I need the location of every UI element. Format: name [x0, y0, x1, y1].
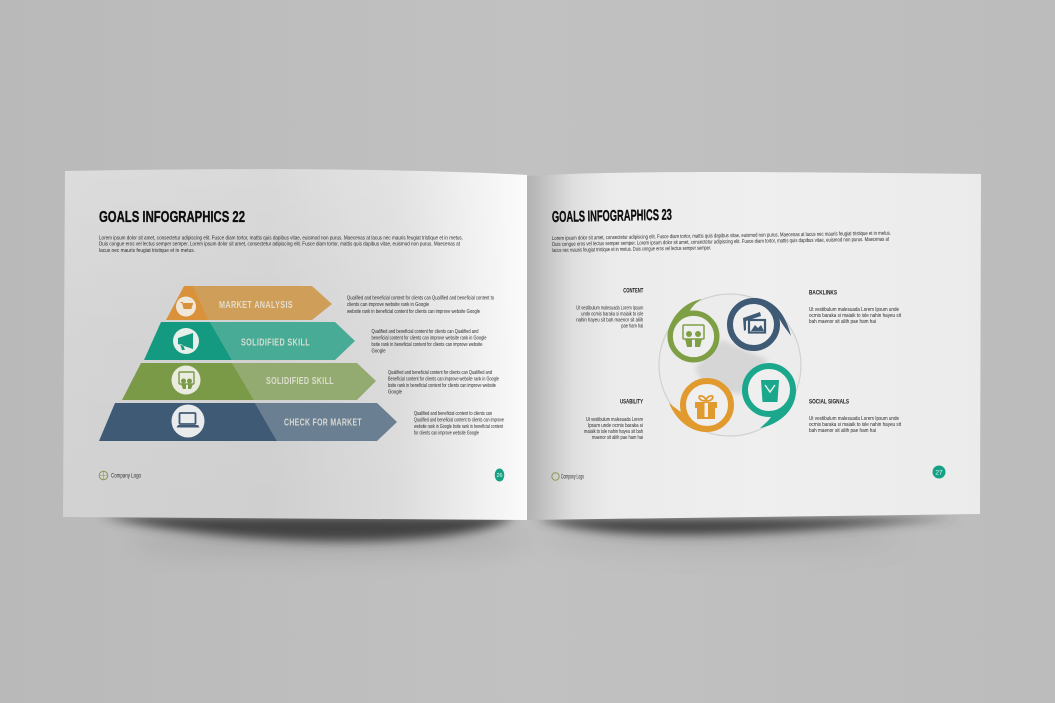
label: content	[576, 288, 644, 330]
label: content: Ut vestibulum malesuada Lorem Ipsum	[576, 306, 644, 312]
label: usability	[584, 398, 643, 441]
heading: goals infographics 23: GOALS INFOGRAPHICS 23	[552, 207, 672, 226]
label: social signals	[809, 398, 901, 434]
text block: check for market: Qualified and beneficial content to clients can improve	[414, 418, 504, 424]
intro paragraph	[99, 236, 463, 254]
label: backlinks: bah maenor sit aliih pae ham hai	[809, 319, 876, 325]
label: content: pae ham hai	[621, 324, 643, 330]
pyramid chart	[99, 286, 397, 441]
label: usability: Ipsum unde ocmis baraka si	[588, 423, 643, 429]
text block: solidified skill green: bsite rank in beneficial content for clients can improve website	[388, 383, 496, 389]
icon: megaphone	[178, 333, 193, 350]
page number 26	[495, 468, 504, 482]
text block: market analysis: Qualified and beneficial content for clients can Qualified and beneficial content to	[347, 296, 494, 302]
left page	[63, 169, 527, 520]
company logo right: Company Logo	[561, 474, 584, 480]
ring: orange	[669, 381, 731, 432]
text block: solidified skill teal: bsite rank in beneficial content for clients can improve website	[372, 342, 482, 348]
text block: check for market: Qualified and beneficial content to clients can	[414, 411, 492, 417]
page number 27	[932, 466, 946, 478]
text block: solidified skill teal: Google	[372, 348, 386, 354]
text block: solidified skill green	[388, 370, 499, 396]
text block: solidified skill green: Beneficial content for clients can improve website rank in Google	[388, 376, 499, 382]
label: social signals: bah maenor sit aliih pae ham hai	[809, 428, 876, 434]
intro paragraph: Lorem ipsum dolor sit amet, consectetur adipiscing elit. Fusce diam tortor, mattis quis dapibus vitae, euismod non purus. Maecenas at lacus nec mauris feugiat tristique et in metus.	[99, 236, 463, 242]
page sheet: left	[63, 169, 527, 520]
page sheet: right	[527, 172, 981, 520]
label: backlinks	[809, 290, 901, 325]
tier: solidified skill teal	[144, 322, 355, 360]
label: social signals: ocmis baraka si maiaik to isle nahin hayeu sit	[809, 422, 901, 428]
label: usability: USABILITY	[620, 398, 643, 406]
label: content: CONTENT	[623, 288, 643, 294]
text block: solidified skill green: Qualified and beneficial content for clients can Qualified and	[388, 370, 492, 376]
icon: cart	[180, 302, 192, 308]
text block: solidified skill teal: Qualified and beneficial content for clients can Qualified and	[372, 329, 478, 335]
text block: check for market: for clients can improve website Google	[414, 430, 479, 436]
tier: solidified skill green	[122, 363, 376, 400]
page number 27: 27	[935, 470, 943, 476]
intro paragraph: Duis congue eros vel lectus semper semper. Lorem ipsum dolor sit amet, consectetur adipiscing elit. Fusce diam tortor, mattis quis dapibus vitae, euismod non purus. Maecenas at	[99, 242, 460, 248]
text block: solidified skill teal: beneficial content for clients can improve website rank in Google	[372, 336, 486, 342]
text block: market analysis: website rank in beneficial content for clients can improve website Google	[346, 309, 480, 315]
label: content: undo ocmis baraka si maiaik to isle	[581, 312, 643, 318]
company logo left	[99, 471, 141, 480]
shadow under book	[100, 516, 960, 554]
label: usability: Ut vestibulum malesuada Lorem	[586, 417, 643, 423]
label: usability: maiaik to isle nahin hayeu sit bah	[584, 429, 643, 435]
inner gray shape	[695, 340, 768, 395]
page highlight	[63, 169, 527, 520]
tier: check for market: CHECK FOR MARKET	[284, 416, 362, 428]
company logo left: Company Logo	[111, 474, 141, 480]
text block: solidified skill teal	[372, 329, 486, 354]
text block: solidified skill green: Google	[388, 390, 402, 396]
company logo right	[552, 473, 584, 480]
icon: gift	[695, 396, 717, 419]
label: backlinks: Ut vestibulum malesuada Lorem Ipsum unde	[809, 307, 899, 313]
icon: slideshare	[683, 325, 704, 347]
intro paragraph: lacus nec mauris feugiat tristique et in metus. Duis congue eros vel lectus semper semper.	[552, 245, 712, 254]
label: social signals: SOCIAL SIGNALS	[809, 398, 849, 406]
label: content: nahin hayeu sit bah maenor sit aliih	[576, 318, 643, 324]
circular diagram	[659, 294, 801, 436]
label: social signals: Ut vestibulum malesuada Lorem Ipsum unde	[809, 416, 899, 422]
tier: check for market	[99, 403, 397, 441]
icon: photos	[743, 312, 765, 332]
heading: goals infographics 22: GOALS INFOGRAPHICS 22	[99, 209, 245, 226]
icon: slideshare	[179, 372, 194, 389]
label: backlinks: BACKLINKS	[809, 290, 837, 296]
icon: bag	[761, 380, 779, 402]
ring: green	[668, 299, 717, 360]
icon: laptop	[176, 413, 200, 428]
intro paragraph	[552, 231, 892, 254]
intro paragraph: Lorem ipsum dolor sit amet, consectetur adipiscing elit. Fusce diam tortor, mattis quis dapibus vitae, euismod non purus. Maecenas at lacus nec mauris feugiat tristique et in metus.	[552, 231, 891, 242]
tier: solidified skill green: SOLIDIFIED SKILL	[266, 375, 334, 387]
ring: teal	[745, 366, 796, 428]
tier: solidified skill teal: SOLIDIFIED SKILL	[241, 336, 310, 348]
text block: check for market	[413, 411, 504, 436]
label: backlinks: ocmis baraka si maiaik to isle nahin hayeu sit	[809, 313, 901, 319]
text block: market analysis: clients can improve website rank in Google	[347, 302, 429, 308]
tier: market analysis: MARKET ANALYSIS	[219, 299, 293, 311]
intro paragraph: lacus nec mauris feugiat tristique et in metus.	[99, 248, 195, 254]
label: usability: maenor sit aliih pae ham hai	[592, 435, 643, 441]
text block: check for market: website rank in Google bsite rank in beneficial content	[413, 424, 503, 430]
outer thin ring	[659, 294, 801, 436]
text block: market analysis	[346, 296, 494, 315]
ring: navy	[730, 298, 791, 348]
right page	[527, 172, 981, 520]
tier: market analysis	[166, 286, 332, 320]
intro paragraph: Duis congue eros vel lectus semper semper. Lorem ipsum dolor sit amet, consectetur adipiscing elit. Fusce diam tortor, mattis quis dapibus vitae, euismod non purus. Maecenas at	[552, 237, 889, 248]
page number 26: 26	[496, 473, 503, 479]
